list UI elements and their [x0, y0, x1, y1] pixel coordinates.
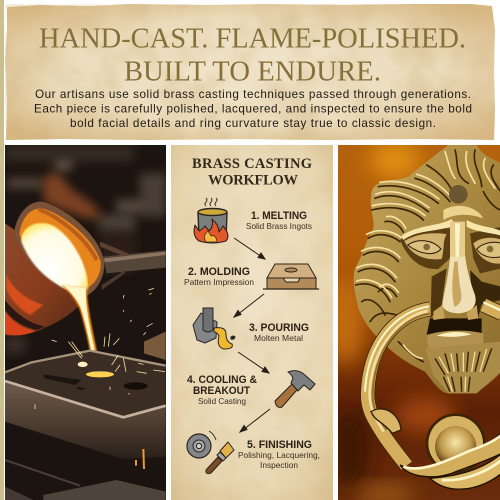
icon: paint brush — [206, 442, 234, 474]
arrow: melting to molding — [234, 238, 265, 259]
step 1 label: Solid Brass Ingots — [246, 221, 312, 231]
step 4 label: 4. COOLING & — [187, 374, 257, 386]
step 2 label — [184, 268, 254, 286]
step 3 label — [249, 324, 308, 341]
ring twist — [400, 432, 500, 489]
workflow heading — [192, 158, 312, 184]
step 2 label: 2. MOLDING — [188, 266, 250, 278]
step 4 label: Solid Casting — [198, 396, 246, 406]
eyes — [408, 241, 500, 258]
workflow heading: WORKFLOW — [208, 172, 298, 188]
smoke — [43, 173, 100, 219]
icon: melting pot — [194, 198, 228, 243]
arrow: pouring to cooling — [238, 352, 269, 373]
step 1 label — [246, 210, 312, 231]
panel: foundry photo — [5, 145, 167, 500]
knot ball — [426, 413, 486, 473]
step 5 label: Polishing, Lacquering, — [238, 450, 320, 460]
step 5 label: Inspection — [260, 460, 298, 470]
lower machinery — [5, 332, 166, 500]
step 2 label: Pattern Impression — [184, 277, 254, 287]
step 4 label: BREAKOUT — [193, 385, 250, 397]
ladle handle — [100, 242, 166, 290]
intro text: bold facial details and ring curvature stay true to classic design. — [70, 117, 436, 130]
ring collar — [371, 409, 401, 433]
step 5 label — [238, 439, 320, 470]
intro text: Each piece is carefully polished, lacquered, and inspected to ensure the bold — [34, 102, 472, 116]
icon: mold box — [263, 264, 319, 289]
mouth — [427, 318, 482, 335]
panel: brass casting workflow — [171, 145, 333, 500]
ladle body — [5, 202, 104, 336]
nose — [442, 255, 476, 313]
heading: HAND-CAST. FLAME-POLISHED. — [39, 24, 466, 54]
step 4 label — [187, 374, 257, 406]
heading — [39, 24, 466, 88]
eye sockets — [400, 228, 450, 269]
lower lip — [427, 331, 483, 348]
casting mold — [5, 350, 166, 459]
knocker ring — [365, 302, 500, 466]
splash and sparks — [35, 288, 165, 469]
step 1 label: 1. MELTING — [251, 210, 307, 222]
ladle rim — [14, 202, 104, 296]
left edge strip — [0, 0, 4, 500]
workflow heading: BRASS CASTING — [192, 156, 312, 172]
intro text: Our artisans use solid brass casting techniques passed through generations. — [35, 88, 471, 101]
icon: hammer — [275, 371, 315, 407]
forehead boss — [449, 185, 468, 204]
step 3 label: 3. POURING — [249, 322, 309, 334]
panel: lion door knocker photo — [325, 142, 500, 500]
step 5 label: 5. FINISHING — [247, 439, 312, 451]
lion head — [354, 145, 500, 393]
beard — [425, 342, 500, 393]
heading: BUILT TO ENDURE. — [124, 56, 381, 88]
dark mane strands — [356, 150, 500, 362]
blurred background glow — [325, 142, 455, 500]
molten stream — [61, 284, 98, 351]
panel: parchment header — [5, 4, 495, 140]
cheek and muzzle shadow — [431, 268, 447, 318]
brow highlights — [402, 219, 455, 240]
photo background — [5, 145, 167, 353]
icon: polishing disc — [187, 431, 216, 458]
arrow: cooling to finishing — [240, 409, 270, 432]
step 3 label: Molten Metal — [254, 333, 303, 343]
intro text — [34, 88, 472, 130]
arrow: molding to pouring — [234, 294, 264, 317]
light mane strands — [357, 152, 495, 358]
molten metal — [21, 223, 88, 295]
icon: pouring crucible — [193, 308, 235, 349]
